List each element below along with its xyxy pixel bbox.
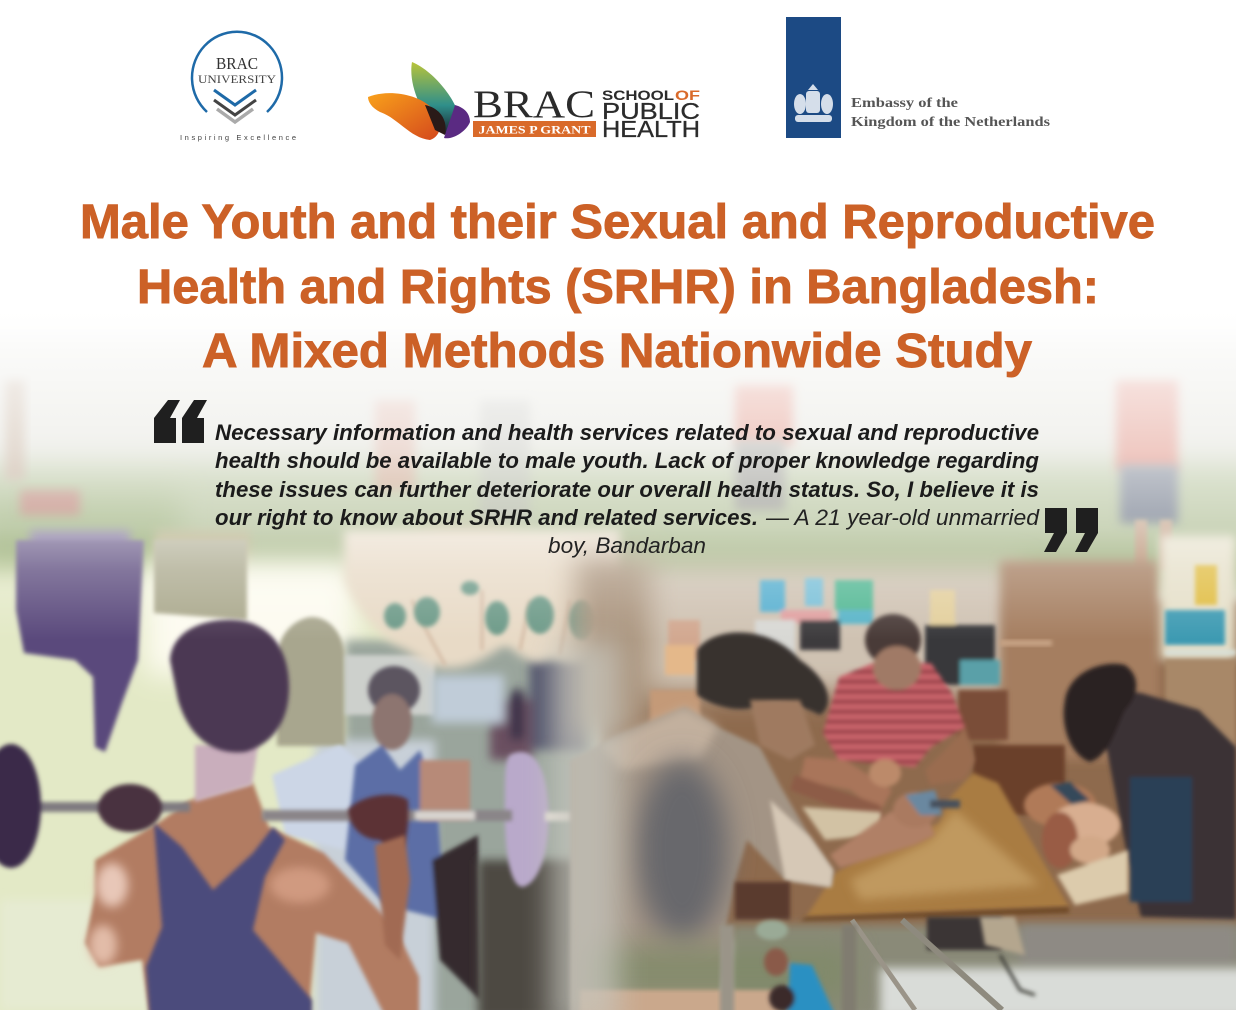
title: Male Youth and their Sexual and Reproductive: [80, 196, 1155, 249]
ground and grass: [580, 917, 1236, 1010]
icon: flame: [368, 62, 470, 140]
quote text: our right to know about SRHR and related services.: [215, 505, 758, 530]
quote text: — A 21 year-old unmarried: [765, 505, 1040, 530]
right forearm: [375, 835, 410, 960]
logo: BRAC James P Grant School of Public Health: HEALTH: [602, 116, 700, 142]
logo: BRAC University: UNIVERSITY: [198, 74, 277, 86]
title: A Mixed Methods Nationwide Study: [202, 325, 1032, 378]
icon: opening quotation mark: [154, 400, 207, 443]
left man arm and phone: [830, 790, 960, 868]
neck: [195, 745, 258, 802]
logo: Embassy of the Kingdom of the Netherlands: [786, 17, 1051, 138]
child in blue shirt: [756, 920, 835, 1010]
logo: BRAC James P Grant School of Public Health: SCHOOL: [602, 87, 675, 103]
icon: right barbell plate: [505, 752, 549, 887]
logo: BRAC University: [180, 32, 296, 142]
photo: playing field: [0, 330, 1236, 600]
quote text: boy, Bandarban: [548, 533, 706, 558]
wooden window frame: [1000, 640, 1052, 646]
photo: shop with young men on phones: [550, 535, 1236, 1010]
dark lower right of mirror: [478, 860, 578, 1010]
head: [170, 620, 289, 752]
photo: gym with weightlifter: [0, 530, 620, 1010]
title: Health and Rights (SRHR) in Bangladesh:: [137, 261, 1099, 314]
icon: left barbell plate: [0, 744, 41, 868]
icon: coat of arms: [794, 84, 833, 122]
logo: BRAC James P Grant School of Public Health: JAMES P GRANT: [478, 122, 590, 136]
quote text: health should be available to male youth. Lack of proper knowledge regarding: [215, 448, 1040, 473]
logo: BRAC James P Grant School of Public Health: BRAC: [473, 83, 595, 126]
fist with tattoos: [344, 530, 620, 668]
mirror background frame: [345, 655, 435, 715]
mirror reflection man: [345, 666, 480, 1000]
title: [80, 196, 1155, 378]
logo: Embassy of the Kingdom of the Netherlands: Kingdom of the Netherlands: [851, 115, 1051, 130]
mirror wall shape: [277, 617, 345, 746]
soft blending edge between photos: [550, 640, 620, 1010]
quote text: [215, 420, 1040, 558]
shop shelves with goods: [650, 565, 1236, 815]
quote text: these issues can further deteriorate our overall health status. So, I believe it is: [215, 477, 1039, 502]
weightlifter body: [85, 783, 419, 1010]
logo: BRAC James P Grant School of Public Health: PUBLIC: [602, 98, 700, 124]
logo: BRAC James P Grant School of Public Health: OF: [675, 87, 701, 103]
khaki wall block: [154, 540, 247, 620]
table: [800, 773, 1069, 922]
logo: BRAC University: BRAC: [216, 54, 258, 73]
left man in beige shirt: [570, 632, 833, 1010]
crouching figure hands and phone: [1024, 782, 1128, 905]
vest: [146, 823, 312, 1010]
right hand: [348, 795, 408, 860]
highlights on shoulder: [89, 863, 330, 965]
white top band: [0, 0, 1236, 291]
logo: BRAC University: Inspiring Excellence: [180, 133, 296, 142]
right man: [1064, 664, 1236, 920]
logo: Embassy of the Kingdom of the Netherlands: Embassy of the: [851, 96, 958, 111]
mirrored phone figure: [432, 660, 585, 760]
left hand: [98, 784, 162, 832]
quote text: Necessary information and health services related to sexual and reproductive: [215, 420, 1039, 445]
white fade over photos: [0, 290, 1236, 640]
man in striped red shirt: [790, 614, 975, 820]
icon: hanging purple cloth: [16, 540, 144, 752]
logo: BRAC James P Grant School of Public Health: [368, 62, 701, 142]
barbell bar: [20, 802, 595, 821]
plastic sheet: [272, 745, 370, 850]
icon: closing quotation mark: [1044, 508, 1098, 552]
